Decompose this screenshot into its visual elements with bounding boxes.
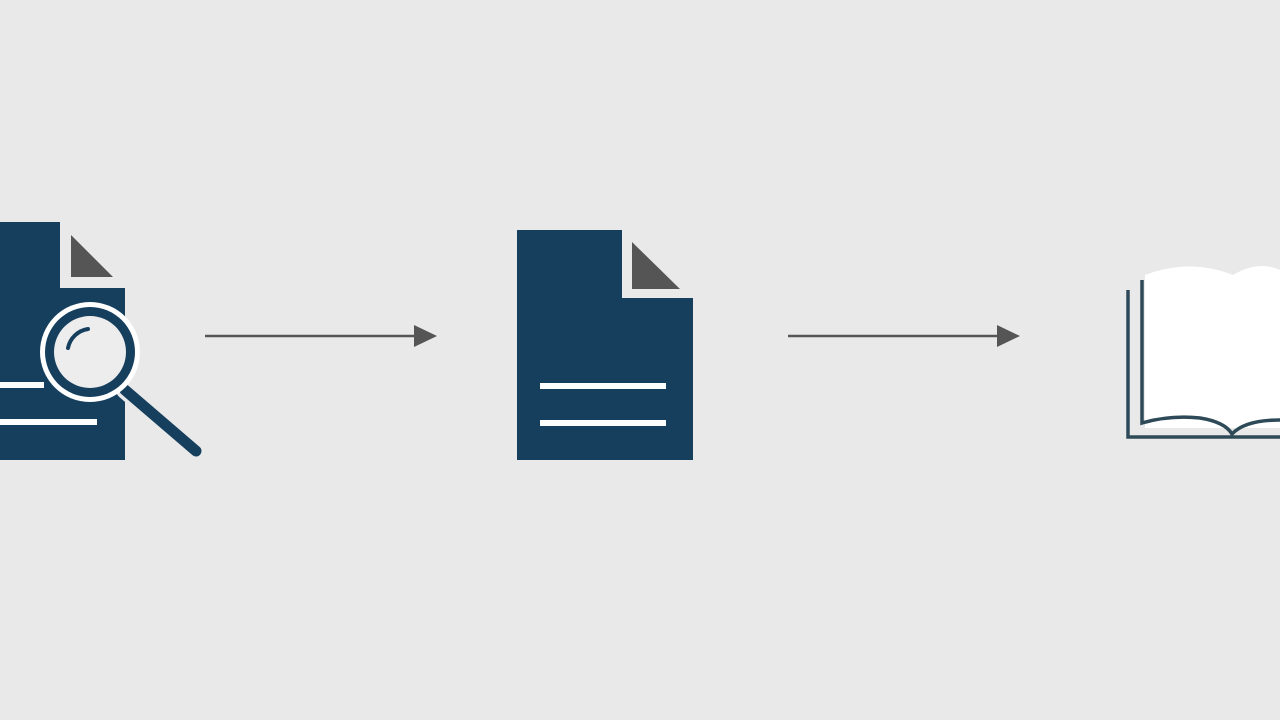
icon: document with magnifier <box>0 222 196 460</box>
arrow 2 <box>788 325 1020 347</box>
arrow 1 <box>205 325 437 347</box>
icon: document <box>517 230 693 460</box>
icon: open book <box>1128 266 1280 437</box>
